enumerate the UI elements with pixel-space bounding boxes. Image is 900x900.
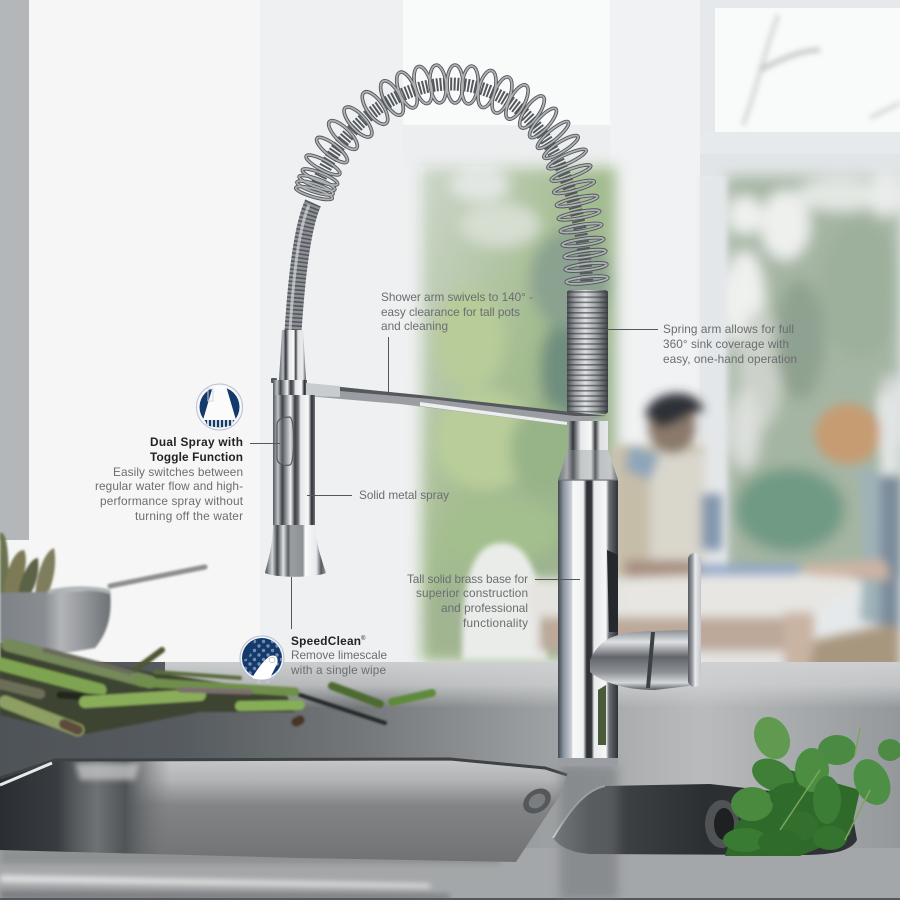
text: tall solid brass base: superior construction [416, 586, 528, 600]
sink herbs: green leaves [723, 711, 900, 856]
faucet: flexible hose [290, 203, 313, 332]
faucet: spray neck and collar [271, 330, 307, 396]
text: SpeedClean: ® [361, 635, 366, 642]
text: dual spray with toggle function: regular water flow and high- [95, 479, 243, 493]
text: shower arm swivels [381, 290, 533, 333]
sink: small basin [553, 784, 857, 855]
faucet: spring coil arch [295, 64, 608, 285]
faucet: main body [558, 421, 618, 766]
text: tall solid brass base [407, 572, 528, 630]
seated people and table, blurred [527, 393, 900, 672]
text: solid metal spray: Solid metal spray [359, 488, 449, 502]
window frame post [700, 176, 726, 576]
counter front lip [0, 848, 900, 900]
text: shower arm swivels: easy clearance for tall pots [381, 305, 520, 319]
faucet reflection in counter [560, 765, 618, 900]
faucet: spray head with toggle [265, 395, 326, 577]
text: dual spray with toggle function: Toggle Function [150, 450, 243, 464]
icon: dual spray [196, 384, 242, 430]
window view: garden, right pane [725, 173, 900, 576]
text: shower arm swivels: and cleaning [381, 319, 448, 333]
text: spring arm [663, 322, 797, 366]
text: dual spray with toggle function: Dual Spray with [150, 435, 243, 449]
text: dual spray with toggle function [95, 435, 244, 523]
text: spring arm: easy, one-hand operation [663, 352, 797, 366]
window view: white chair behind the faucet [462, 543, 548, 660]
faucet: horizontal swivel arm [306, 383, 607, 425]
faucet: ribbed spring tube [567, 290, 608, 414]
asparagus and peeler on counter [0, 642, 432, 735]
text: dual spray with toggle function: turning off the water [135, 509, 243, 523]
text: shower arm swivels: Shower arm swivels to 140° - [381, 290, 533, 304]
text: tall solid brass base: Tall solid brass base for [407, 572, 528, 586]
sink: large basin [0, 755, 570, 865]
leader lines [250, 330, 658, 629]
text: dual spray with toggle function: Easily switches between [113, 465, 243, 479]
faucet: mixer lever [590, 553, 701, 690]
text: SpeedClean: SpeedClean [291, 634, 361, 648]
text: SpeedClean: with a single wipe [290, 663, 386, 677]
text: SpeedClean: Remove limescale [291, 648, 387, 662]
counter top [0, 662, 900, 900]
colander bowl with asparagus bunch [0, 533, 205, 654]
text: tall solid brass base: functionality [463, 616, 528, 630]
text: spring arm: 360° sink coverage with [663, 337, 789, 351]
text: spring arm: Spring arm allows for full [663, 322, 794, 336]
text: SpeedClean [290, 634, 387, 677]
text: tall solid brass base: and professional [441, 601, 528, 615]
window view: garden, left pane [421, 167, 616, 662]
icon: SpeedClean nozzle [240, 636, 284, 684]
tree branches in top window [743, 15, 900, 125]
text: dual spray with toggle function: performance spray without [100, 494, 244, 508]
